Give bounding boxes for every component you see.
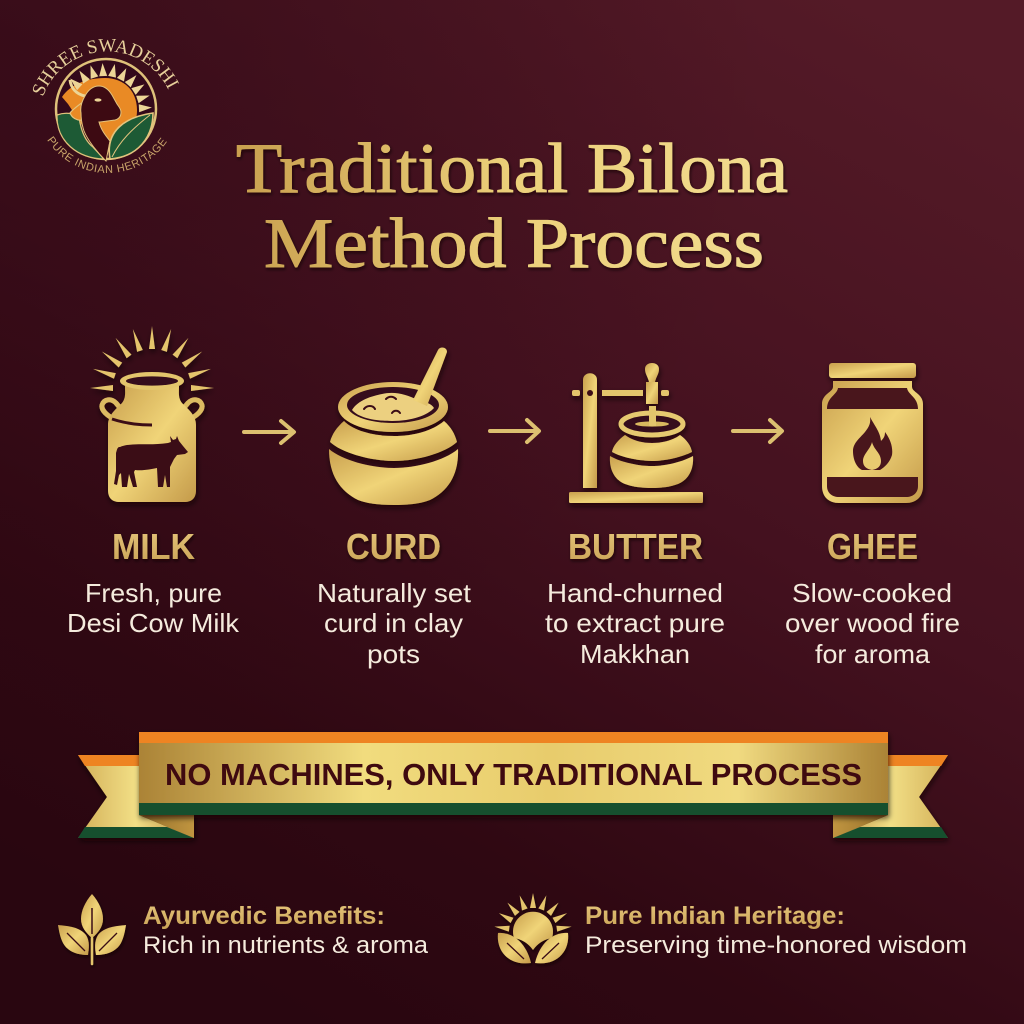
inner flame: [863, 442, 881, 470]
icon: ghee jar with flame: [822, 363, 923, 503]
curd: [352, 393, 434, 421]
text: butter description: to extract pure: [545, 608, 725, 638]
text: milk description: [67, 578, 240, 638]
logo tagline: PURE INDIAN HERITAGE: [48, 136, 167, 173]
text: curd description: Naturally set: [317, 578, 472, 608]
logo sun rays: [67, 63, 152, 112]
arrow 2: [490, 420, 539, 442]
text: ayurvedic benefits: [143, 902, 429, 959]
label: butter: BUTTER: [568, 526, 703, 567]
logo: Shree Swadeshi: [32, 39, 180, 173]
label: curd: CURD: [346, 526, 441, 567]
arrow 3: [733, 420, 782, 442]
spoon: [413, 348, 447, 406]
text: curd description: [317, 578, 472, 669]
label: ghee: GHEE: [827, 526, 918, 567]
logo sun: [62, 78, 137, 150]
text: ghee description: for aroma: [815, 639, 931, 669]
text: curd description: pots: [367, 639, 420, 669]
can rim: [120, 372, 184, 390]
logo ear: [70, 100, 86, 120]
text: ayurvedic benefits: Rich in nutrients & aroma: [143, 932, 429, 959]
text: pure indian heritage: Pure Indian Heritage:: [585, 902, 845, 930]
stem: [91, 938, 93, 964]
churn pot body: [612, 435, 692, 461]
logo horn: [70, 80, 85, 96]
text: butter description: Makkhan: [580, 639, 690, 669]
post: [583, 373, 597, 488]
text: ayurvedic benefits: Ayurvedic Benefits:: [143, 902, 385, 930]
text: curd description: curd in clay: [324, 608, 463, 638]
ribbon banner: [78, 732, 948, 838]
text: milk description: Desi Cow Milk: [67, 608, 240, 638]
logo cow head: [81, 86, 121, 161]
can body: [108, 386, 196, 502]
left leaf: [58, 925, 89, 955]
label: milk: MILK: [112, 526, 195, 567]
pot lower body: [329, 449, 458, 505]
text: ghee description: [785, 578, 960, 669]
pot upper body: [330, 421, 457, 461]
icon: sun over leaves: [494, 893, 572, 963]
crossbar: [572, 390, 669, 396]
handles: [102, 400, 202, 418]
lower window: [827, 477, 918, 497]
logo green field: [57, 113, 104, 159]
title line 2: Method Process: [264, 205, 764, 283]
title line 1: Traditional Bilona: [236, 130, 788, 208]
text: milk description: Fresh, pure: [85, 578, 222, 608]
text: ghee description: over wood fire: [785, 608, 960, 638]
logo brand name: SHREE SWADESHI: [32, 39, 180, 96]
cow silhouette: [114, 436, 188, 487]
text: butter description: Hand-churned: [547, 578, 723, 608]
base: [569, 492, 703, 503]
text: butter description: [545, 578, 725, 669]
top leaf: [81, 894, 103, 938]
icon: ayurvedic leaves: [58, 894, 126, 964]
left ribbon tail: [78, 755, 194, 838]
churn handle: [645, 363, 659, 382]
pot rim: [338, 382, 448, 432]
sun rays: [494, 893, 572, 932]
icon: curd pot with spoon: [329, 348, 458, 505]
title: [236, 130, 788, 283]
right ribbon tail: [833, 755, 948, 838]
left leaf bowl: [498, 933, 531, 963]
flame: [853, 417, 892, 470]
upper window: [827, 388, 918, 409]
sun disc: [513, 912, 553, 950]
text: pure indian heritage: Preserving time-honored wisdom: [585, 932, 967, 959]
ribbon main band: [139, 732, 888, 815]
churn pot rim: [621, 413, 683, 435]
ribbon text: NO MACHINES, ONLY TRADITIONAL PROCESS: [165, 757, 862, 792]
right leaf bowl: [535, 933, 568, 963]
logo leaf: [109, 113, 153, 159]
icon: butter churn: [569, 363, 703, 503]
sun rays: [90, 326, 214, 391]
jar outline: [822, 381, 923, 503]
text: pure indian heritage: [585, 902, 967, 959]
can groove: [112, 419, 152, 425]
icon: milk can with sun rays and cow: [90, 326, 214, 502]
lid: [829, 363, 916, 378]
right leaf: [95, 925, 126, 955]
text: ghee description: Slow-cooked: [792, 578, 952, 608]
arrow 1: [244, 421, 294, 443]
